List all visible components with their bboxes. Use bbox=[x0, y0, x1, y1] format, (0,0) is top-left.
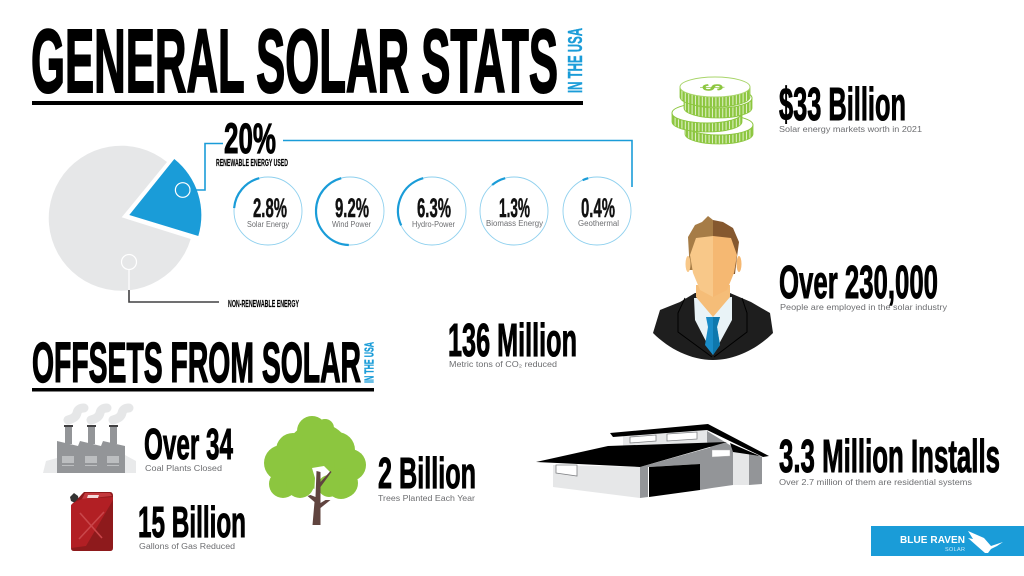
ring: wind power bbox=[315, 176, 385, 246]
subtitle: in the USA: IN THE USA bbox=[362, 342, 376, 383]
caption: employed: People are employed in the solar industry bbox=[780, 302, 948, 312]
ring: geothermal: 0.4% bbox=[581, 193, 615, 223]
pie chart bbox=[49, 146, 201, 291]
connector: breakdown line bbox=[283, 140, 632, 187]
stat block: installs bbox=[536, 424, 1000, 498]
ring: wind power: 9.2% bbox=[335, 193, 369, 223]
icon: jerry can bbox=[70, 492, 113, 551]
ring: hydro-power: Hydro-Power bbox=[412, 219, 455, 229]
non-renewable slice bbox=[49, 146, 191, 291]
connector: non-renewable line bbox=[129, 290, 219, 302]
non-renewable label: NON-RENEWABLE ENERGY bbox=[228, 299, 299, 310]
ring: biomass energy: Biomass Energy bbox=[486, 218, 544, 228]
renewable marker bbox=[175, 183, 190, 197]
ring: solar energy: 2.8% bbox=[253, 193, 287, 223]
panel: offsets from solar: OFFSETS FROM SOLAR bbox=[32, 331, 361, 395]
icon: tree bbox=[264, 416, 366, 525]
caption: metric tons: Metric tons of CO₂ reduced bbox=[449, 359, 557, 369]
caption: trees planted: Trees Planted Each Year bbox=[378, 493, 475, 503]
stat: 2 billion: 2 Billion bbox=[378, 449, 476, 498]
caption: coal plants: Coal Plants Closed bbox=[145, 463, 222, 473]
20 percent stat: 20% bbox=[224, 115, 276, 163]
stat: 33 billion: $33 Billion bbox=[779, 78, 906, 130]
icon: factory bbox=[43, 408, 136, 473]
ring: geothermal: Geothermal bbox=[578, 218, 619, 228]
heading underline bbox=[32, 388, 374, 392]
ring: hydro-power: 6.3% bbox=[417, 193, 451, 223]
ring: wind power: Wind Power bbox=[332, 219, 371, 229]
logo: blue raven solar: SOLAR bbox=[945, 547, 965, 553]
stat block: CO2 reduced bbox=[448, 314, 577, 369]
connector: renewable leader bbox=[190, 144, 223, 190]
stat: 136 million: 136 Million bbox=[448, 314, 577, 366]
title underline bbox=[32, 101, 583, 105]
renewable label: RENEWABLE ENERGY USED bbox=[216, 158, 288, 169]
logo: blue raven solar: BLUE RAVEN bbox=[900, 535, 965, 546]
caption: market worth: Solar energy markets worth in 2021 bbox=[779, 124, 922, 134]
panel: general solar stats bbox=[31, 12, 642, 310]
stat: 15 billion: 15 Billion bbox=[138, 498, 246, 547]
caption: residential: Over 2.7 million of them are residential systems bbox=[779, 477, 972, 487]
icon: businessman bbox=[653, 216, 773, 360]
icon: coin stack bbox=[672, 77, 753, 144]
caption: gallons of gas: Gallons of Gas Reduced bbox=[139, 541, 235, 551]
renewable slice bbox=[129, 159, 201, 236]
ring: geothermal bbox=[552, 166, 642, 256]
non-renewable marker bbox=[122, 254, 136, 270]
icon: raven bbox=[968, 531, 1003, 553]
ring: biomass energy bbox=[466, 163, 562, 259]
logo: blue raven solar bbox=[871, 526, 1024, 556]
icon: house with solar roof bbox=[536, 424, 769, 498]
ring: solar energy bbox=[231, 174, 305, 248]
ring: solar energy: Solar Energy bbox=[247, 219, 290, 229]
stat block: employment bbox=[653, 216, 948, 360]
stat block: market worth bbox=[672, 77, 922, 144]
ring: biomass energy: 1.3% bbox=[499, 193, 530, 223]
dollar sign: $ bbox=[695, 84, 730, 91]
non-renewable leader line bbox=[128, 270, 130, 290]
panel: offsets from solar bbox=[32, 331, 476, 551]
ring: hydro-power bbox=[387, 166, 477, 256]
stat: over 34: Over 34 bbox=[144, 420, 233, 469]
